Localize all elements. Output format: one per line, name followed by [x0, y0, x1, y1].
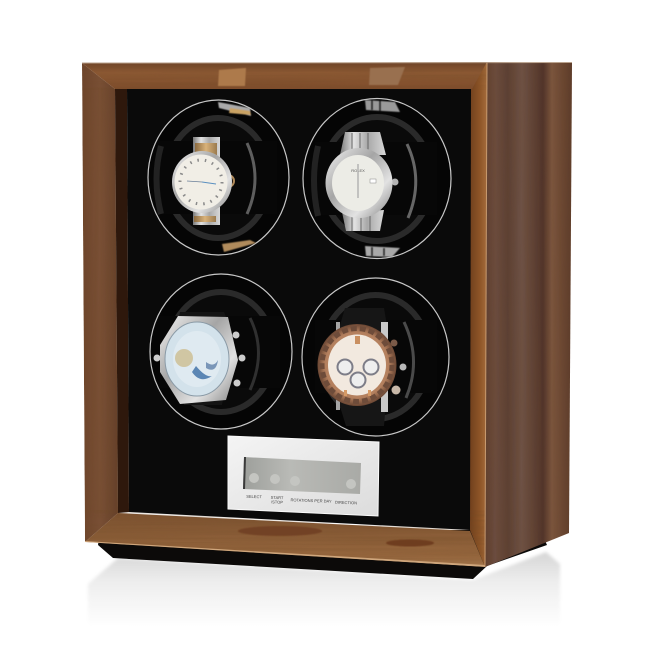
watch: steel diamond watch — [326, 132, 398, 231]
control panel — [228, 436, 379, 516]
winder ring — [148, 100, 289, 255]
button labels — [246, 494, 357, 505]
button labels: START — [271, 495, 284, 500]
highlight edge — [85, 541, 485, 567]
mirrored bracelet links — [365, 100, 400, 257]
left bevel — [82, 63, 118, 542]
right bevel — [470, 62, 487, 567]
winder ring — [150, 274, 292, 429]
winder top right with steel watch — [303, 98, 451, 258]
floor reflection — [88, 552, 560, 640]
button labels: /STOP — [271, 499, 283, 505]
watch: blue-dial chronograph — [154, 312, 246, 405]
button labels: DIRECTION — [335, 500, 357, 505]
product photo: four-watch winder cabinet — [82, 62, 572, 606]
winder bottom left with blue chronograph — [150, 274, 292, 429]
stain marks on bottom bevel — [238, 526, 322, 536]
winder bottom right with rose gold chronograph — [302, 278, 449, 436]
winder ring — [303, 98, 451, 258]
cabinet side panel — [485, 60, 573, 570]
subdials — [338, 360, 352, 374]
watch: rose-gold chronograph — [318, 308, 406, 426]
reflection: watch one on top bevel — [218, 68, 246, 86]
winder ring — [302, 278, 449, 436]
button labels: SELECT — [246, 494, 262, 499]
wood grain — [82, 74, 486, 90]
black felt interior — [115, 89, 471, 530]
reflection: watch two on top bevel — [369, 67, 405, 85]
vertical edge between front and side — [485, 62, 487, 567]
dial details — [175, 349, 193, 367]
LCD display — [243, 457, 361, 494]
watch: two-tone dress watch — [172, 137, 234, 225]
bottom bevel — [85, 513, 485, 567]
cabinet base — [98, 530, 547, 579]
dial markings — [180, 160, 222, 204]
mirrored bracelet links — [218, 102, 256, 252]
dial markings: ROLEX — [351, 168, 365, 173]
winder top left with two-tone watch — [148, 100, 289, 255]
button labels: ROTATIONS PER DAY — [290, 497, 332, 504]
cabinet front frame — [80, 60, 490, 570]
top edge highlight — [82, 62, 572, 64]
top bevel — [82, 62, 487, 89]
